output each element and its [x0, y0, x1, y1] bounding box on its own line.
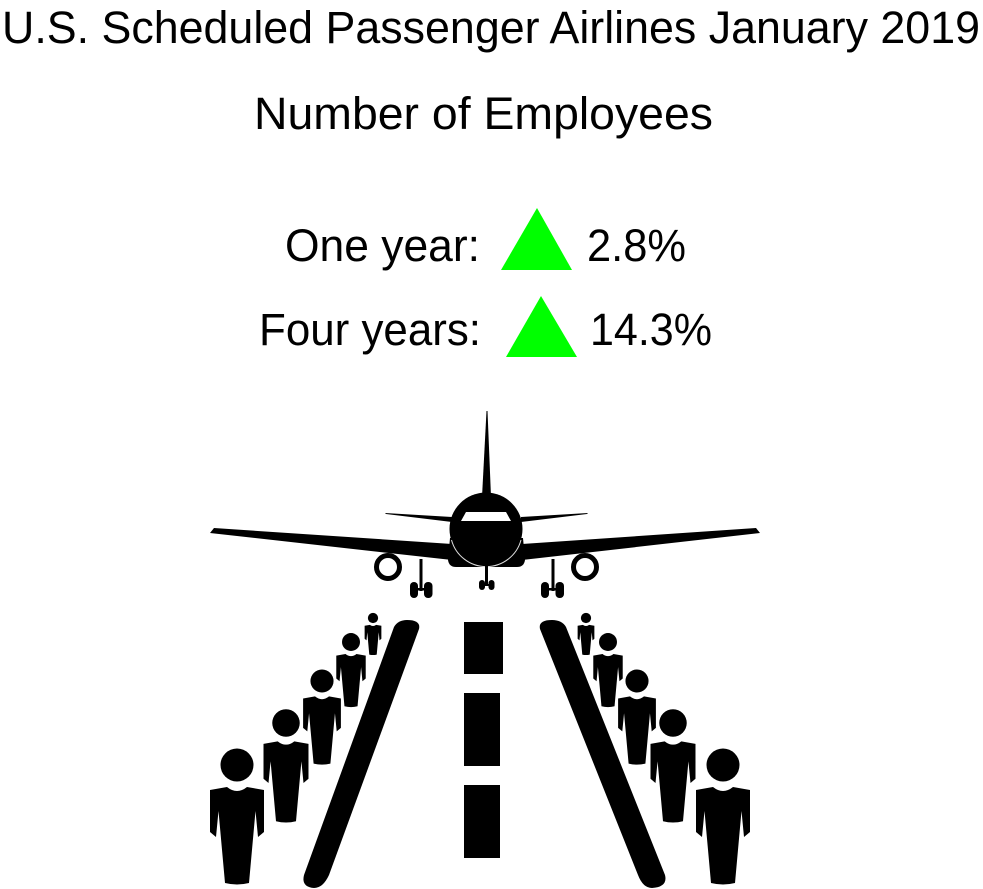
stat: one year change: 2.8%	[587, 220, 686, 271]
stat: four year change: Four years:	[259, 304, 481, 355]
stat: one year change	[285, 208, 686, 271]
right line of employees	[578, 613, 750, 884]
stat: four year change	[259, 296, 712, 357]
left runway edge	[303, 620, 419, 888]
right runway edge	[540, 620, 665, 888]
subtitle: Number of Employees	[254, 88, 713, 139]
runway centre dashes	[464, 622, 503, 858]
left line of employees	[210, 613, 381, 884]
title: U.S. Scheduled Passenger Airlines January 2019	[2, 2, 980, 53]
stat: four year change: 14.3%	[590, 304, 712, 355]
icon: airplane front view	[210, 411, 760, 598]
stat: one year change: One year:	[285, 220, 480, 271]
